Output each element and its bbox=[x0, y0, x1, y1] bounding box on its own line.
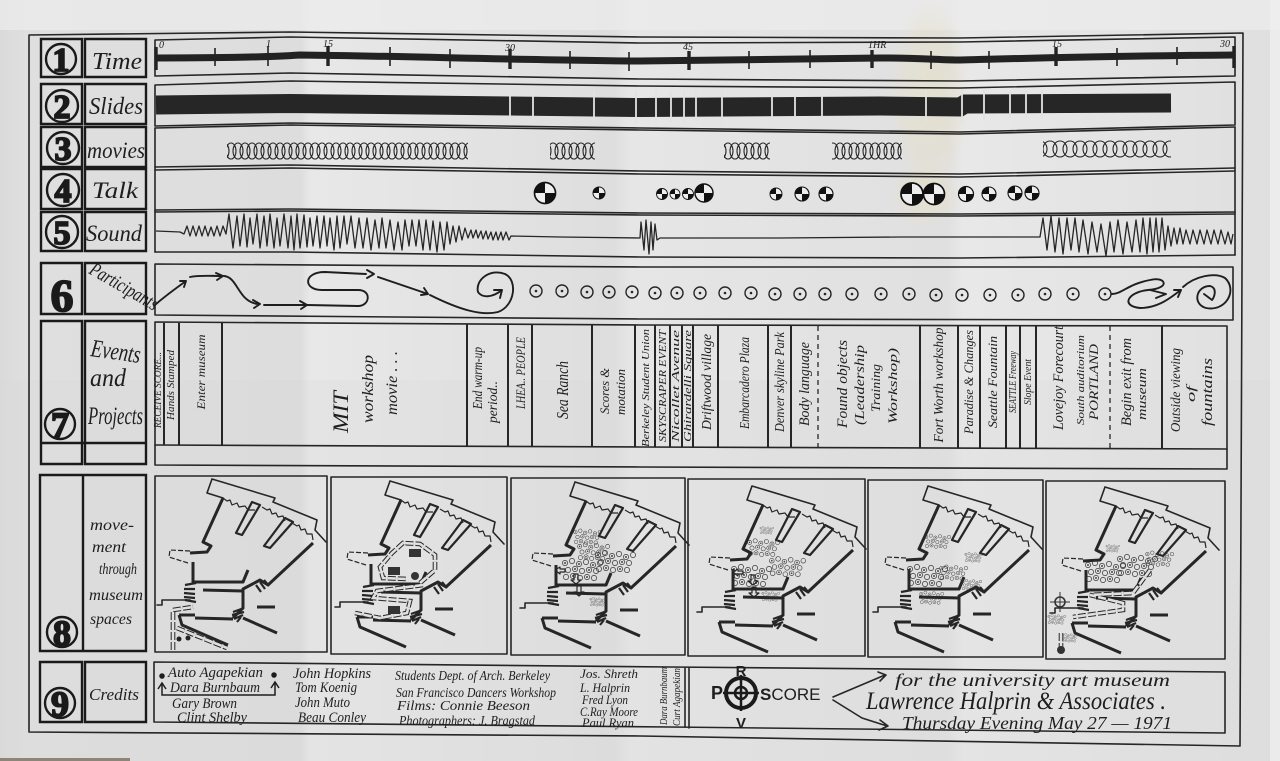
plan panel 4 bbox=[688, 479, 866, 656]
label: sound: Sound bbox=[86, 221, 142, 246]
time labels: 15 bbox=[1052, 39, 1062, 50]
event labels: PORTLAND bbox=[1086, 343, 1101, 421]
row 5: sound bbox=[41, 212, 1235, 258]
event labels: SKYSCRAPER EVENT bbox=[657, 329, 669, 442]
number 5 bbox=[46, 215, 78, 252]
credit names column 1: Clint Shelby bbox=[177, 710, 247, 726]
number 7: 7 bbox=[51, 405, 69, 445]
credit names column 3: Students Dept. of Arch. Berkeley bbox=[395, 669, 551, 684]
credit names column 2: John Muto bbox=[295, 695, 350, 711]
credit names column 1 bbox=[167, 665, 263, 726]
title line: date: Thursday Evening May 27 — 1971 bbox=[902, 713, 1172, 733]
event labels: motation bbox=[613, 369, 628, 415]
event labels: Ghirardelli Square bbox=[682, 330, 694, 442]
label: talk: Talk bbox=[92, 178, 139, 203]
plan panel 6 bbox=[1046, 481, 1225, 659]
rotated credit names bbox=[659, 667, 683, 726]
row 8: movement through museum spaces bbox=[40, 475, 1225, 659]
slide bar bbox=[156, 103, 1171, 108]
plan panel 1 bbox=[155, 476, 327, 652]
slide gaps bbox=[510, 90, 1042, 124]
label: movement through museum spaces: ment bbox=[92, 539, 127, 556]
score symbol: P R S V: P bbox=[711, 683, 723, 703]
title line: Lawrence Halprin and Associates: Lawrence Halprin & Associates . bbox=[865, 688, 1166, 715]
event labels: Denver skyline Park bbox=[773, 331, 788, 433]
credit names column 4: L. Halprin bbox=[579, 680, 630, 695]
number 4: 4 bbox=[54, 173, 72, 210]
label: movies: movies bbox=[87, 138, 145, 163]
event labels: fountains bbox=[1200, 358, 1216, 426]
label: movement through museum spaces: spaces bbox=[90, 611, 132, 628]
credit names column 3: Films: Connie Beeson bbox=[396, 699, 530, 714]
credit names column 2: John Hopkins bbox=[293, 666, 371, 682]
score wordmark: SCORE bbox=[760, 685, 820, 704]
row 4: talk bbox=[41, 169, 1235, 216]
time labels: 30 bbox=[1219, 39, 1230, 50]
credit names column 2: Beau Conley bbox=[298, 710, 366, 726]
event labels: Lovejoy Forecourt bbox=[1051, 325, 1067, 431]
plan panel 2 bbox=[331, 477, 507, 654]
bracket arrow bbox=[158, 673, 279, 695]
number 9: 9 bbox=[51, 684, 69, 724]
event labels: South auditorium bbox=[1075, 335, 1087, 425]
row 1: time bbox=[41, 37, 1235, 81]
row 9: credits bbox=[40, 662, 1225, 733]
row 3: movies bbox=[41, 127, 1235, 255]
number 6: 6 bbox=[50, 270, 74, 321]
label: movement through museum spaces bbox=[89, 517, 143, 628]
event labels: workshop bbox=[360, 355, 377, 423]
label: slides: Slides bbox=[89, 94, 143, 120]
plan panel 5 bbox=[868, 480, 1043, 657]
event labels: Paradise & Changes bbox=[961, 330, 976, 435]
event labels: Sea Ranch bbox=[553, 361, 572, 419]
number 7 bbox=[45, 405, 75, 445]
label: events and projects: Projects bbox=[87, 403, 143, 430]
event labels: Found objects bbox=[835, 340, 851, 429]
row 2: slides bbox=[41, 81, 1235, 134]
rotated credit names: Dara Burnbaum bbox=[659, 667, 670, 726]
time labels: 15 bbox=[323, 39, 333, 50]
event labels: End warm-up bbox=[471, 347, 486, 410]
time labels: 1HR bbox=[868, 40, 886, 51]
event labels: Training bbox=[868, 363, 883, 412]
credit names column 3 bbox=[395, 669, 556, 729]
event labels: Fort Worth workshop bbox=[932, 327, 947, 443]
participant dots bbox=[530, 285, 1111, 301]
time labels: 0 bbox=[159, 40, 164, 51]
event labels: Embarcadero Plaza bbox=[738, 337, 753, 430]
event labels: Scores & bbox=[597, 367, 612, 414]
event labels: Hands Stamped bbox=[166, 349, 177, 421]
event labels: Slope Event bbox=[1022, 358, 1034, 405]
event labels: museum bbox=[1134, 368, 1149, 420]
label: time: Time bbox=[92, 49, 142, 75]
event labels: Berkeley Student Union bbox=[640, 328, 652, 447]
event labels bbox=[153, 325, 1216, 447]
event labels: Nicollet Avenue bbox=[670, 330, 682, 444]
event labels: period.. bbox=[486, 381, 501, 424]
row 6: participants bbox=[41, 258, 1233, 321]
event labels: Workshop) bbox=[885, 348, 900, 424]
talk circles bbox=[534, 182, 1039, 205]
credit names column 4 bbox=[579, 666, 638, 730]
sound wave bbox=[156, 214, 1233, 256]
credit names column 4: Fred Lyon bbox=[581, 692, 628, 707]
number 8: 8 bbox=[53, 613, 71, 653]
event labels: (Leadership bbox=[853, 345, 868, 425]
event labels: MIT bbox=[328, 389, 353, 434]
credit names column 2: Tom Koenig bbox=[295, 680, 357, 696]
number 3 bbox=[47, 131, 79, 168]
label: movement through museum spaces: museum bbox=[89, 587, 143, 604]
score symbol: P R S V: V bbox=[736, 715, 746, 732]
number 2: 2 bbox=[54, 89, 70, 126]
title line: for the university art museum: for the university art museum bbox=[895, 670, 1170, 690]
event labels: Body language bbox=[797, 342, 813, 426]
time labels: 45 bbox=[683, 42, 693, 53]
credit names column 4: Jos. Shreth bbox=[580, 666, 638, 681]
movie coils bbox=[227, 140, 1171, 160]
event labels: Seattle Fountain bbox=[985, 336, 1000, 428]
credit names column 3: San Francisco Dancers Workshop bbox=[396, 686, 556, 701]
event dividers bbox=[164, 323, 1162, 449]
event labels: RECEIVE SCORE... bbox=[153, 352, 164, 429]
label: movement through museum spaces: through bbox=[99, 561, 137, 578]
number 1 bbox=[46, 42, 76, 79]
credit names column 4: C.Ray Moore bbox=[580, 704, 638, 719]
credit names column 4: Paul Ryan bbox=[581, 715, 634, 730]
label: events and projects: and bbox=[90, 365, 126, 392]
score symbol: P R S V bbox=[711, 663, 759, 732]
score symbol: P R S V: R bbox=[736, 663, 747, 680]
number 2 bbox=[46, 89, 78, 126]
time labels: 1 bbox=[266, 39, 271, 50]
credit names column 2 bbox=[293, 666, 371, 726]
label: movement through museum spaces: move- bbox=[90, 517, 134, 534]
event labels: Outside viewing bbox=[1169, 348, 1184, 432]
participant movement arrows bbox=[155, 270, 1230, 313]
plan panel 3 bbox=[511, 478, 689, 655]
number 1: 1 bbox=[52, 42, 70, 79]
label: credits: Credits bbox=[89, 685, 139, 704]
credit names column 3: Photographers: J. Bragstad bbox=[398, 714, 536, 729]
branching arrows bbox=[833, 672, 888, 730]
time ticks bbox=[215, 46, 1177, 71]
number 8 bbox=[47, 613, 77, 653]
event labels: movie . . . bbox=[384, 351, 401, 415]
event labels: Enter museum bbox=[194, 334, 208, 411]
number 5: 5 bbox=[54, 215, 70, 252]
event labels: of bbox=[1183, 382, 1198, 402]
time labels: 30 bbox=[504, 43, 515, 54]
event labels: LHEA.. PEOPLE bbox=[513, 337, 528, 410]
credit names column 1: Auto Agapekian bbox=[167, 665, 263, 681]
label: events and projects bbox=[87, 335, 143, 430]
label: events and projects: Events bbox=[88, 335, 142, 369]
number 9 bbox=[45, 684, 75, 724]
time bar bbox=[156, 55, 1235, 61]
event labels: SEATTLE Freeway bbox=[1007, 351, 1019, 413]
number 4 bbox=[47, 173, 79, 210]
number 3: 3 bbox=[54, 131, 72, 168]
event labels: Begin exit from bbox=[1119, 338, 1135, 426]
row 7: events and projects bbox=[41, 321, 1227, 469]
rotated credit names: Curt Agapekian bbox=[672, 668, 683, 726]
credit names column 1: Dara Burnbaum bbox=[169, 680, 260, 696]
time labels bbox=[159, 39, 1230, 54]
credit names column 1: Gary Brown bbox=[172, 696, 237, 712]
event labels: Driftwood village bbox=[700, 334, 715, 431]
label: participants: Participants bbox=[85, 258, 162, 315]
